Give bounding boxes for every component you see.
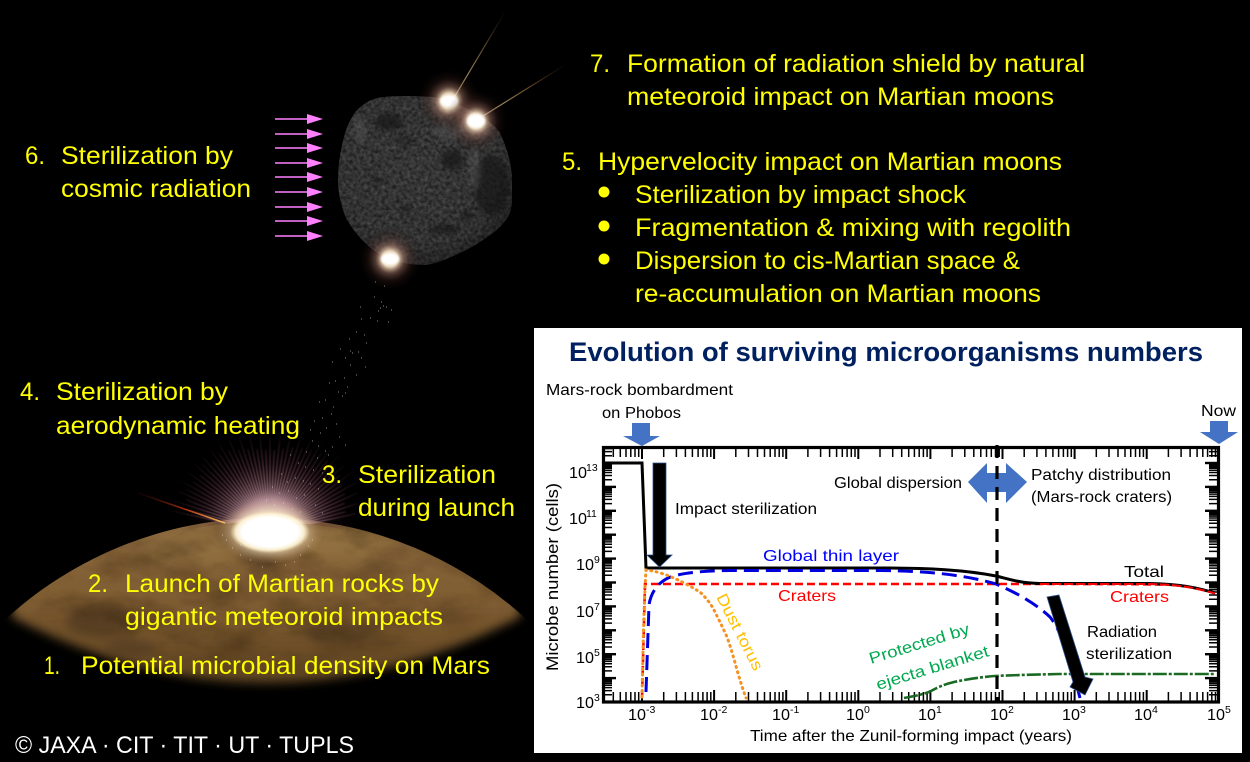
x axis tick labels: -2 — [718, 704, 727, 716]
text: step 2 — [88, 570, 443, 631]
copyright: © JAXA · CIT · TIT · UT · TUPLS — [15, 732, 354, 759]
y axis tick labels: 3 — [594, 692, 600, 704]
x axis tick labels: 10 — [1062, 707, 1080, 724]
label: dust torus: Dust torus — [712, 591, 766, 674]
text: step 7 — [590, 50, 1085, 111]
annotation: Mars-rock bombardment: on Phobos — [602, 405, 681, 422]
label: protected by ejecta blanket: Protected by — [867, 621, 972, 668]
text: step 2: 2. — [88, 570, 108, 598]
text: step 6: 6. — [25, 142, 45, 170]
y axis title: Microbe number (cells) — [543, 483, 562, 671]
y axis tick labels: 13 — [586, 462, 598, 474]
arrow: now — [1200, 421, 1238, 444]
x axis tick labels: 4 — [1152, 704, 1158, 716]
x axis tick labels: 2 — [1008, 704, 1014, 716]
label: global dispersion: Global dispersion — [834, 475, 962, 492]
y axis tick labels: 10 — [576, 604, 594, 621]
x axis tick labels: 10 — [1134, 707, 1152, 724]
x axis tick labels: 10 — [700, 707, 718, 724]
text: step 2: gigantic meteoroid impacts — [125, 603, 443, 631]
x axis tick labels: 10 — [918, 707, 936, 724]
label: radiation sterilization: Radiation — [1087, 624, 1157, 641]
text: step 4: aerodynamic heating — [56, 412, 300, 440]
chart frame — [604, 448, 1218, 702]
text: step 3 — [322, 461, 515, 522]
illustration: launch burst — [138, 436, 358, 562]
text: step 5: Fragmentation & mixing with regolith — [635, 214, 1071, 242]
text: step 5: 5. — [562, 148, 582, 176]
curve: craters overlay — [1040, 584, 1215, 594]
text: step 3: Sterilization — [358, 461, 496, 489]
label: radiation sterilization — [1086, 624, 1172, 663]
x axis tick labels: 10 — [1207, 707, 1225, 724]
y axis tick labels: 10 — [576, 695, 594, 712]
text: step 7: Formation of radiation shield by natural — [627, 50, 1085, 78]
text: step 6: Sterilization by — [61, 142, 234, 170]
chart title: Evolution of surviving microorganisms numbers — [569, 337, 1203, 367]
cosmic radiation arrows — [275, 114, 323, 241]
annotation: Now: Now — [1201, 403, 1236, 420]
text: step 4 — [20, 378, 300, 440]
annotation: Mars-rock bombardment — [546, 382, 734, 422]
label: patchy distribution: (Mars-rock craters) — [1031, 489, 1172, 506]
label: impact sterilization: Impact sterilization — [675, 501, 817, 518]
y axis tick labels: 10 — [576, 650, 594, 667]
curve: dust torus — [642, 570, 746, 698]
text: step 5: Hypervelocity impact on Martian moons — [598, 148, 1062, 176]
y axis tick labels: 10 — [569, 465, 587, 482]
text: step 5: Sterilization by impact shock — [635, 181, 967, 209]
y axis tick labels: 10 — [569, 511, 587, 528]
axis ticks — [592, 440, 1219, 702]
x axis tick labels: 0 — [864, 704, 870, 716]
label: total: Total — [1124, 564, 1164, 581]
label: protected by ejecta blanket: ejecta blanket — [874, 643, 992, 694]
x axis tick labels — [628, 704, 1231, 724]
text: step 2: Launch of Martian rocks by — [125, 570, 440, 598]
text: step 6: cosmic radiation — [61, 175, 251, 203]
text: step 3: during launch — [358, 494, 515, 522]
y axis tick labels — [569, 462, 600, 712]
divider: dashed vertical — [995, 445, 999, 702]
illustration: Mars surface — [7, 519, 525, 690]
text: step 4: Sterilization by — [56, 378, 229, 406]
text: step 5 — [562, 148, 1071, 308]
arrow: dispersion double arrow — [968, 463, 1027, 503]
x axis tick labels: 10 — [628, 707, 646, 724]
illustration: ejecta particles — [222, 282, 392, 567]
text: step 4: 4. — [20, 378, 40, 406]
x axis tick labels: 5 — [1225, 704, 1231, 716]
arrow: impact sterilization — [647, 463, 672, 567]
x axis tick labels: 10 — [990, 707, 1008, 724]
y axis tick labels: 11 — [586, 508, 597, 520]
text: step 5: re-accumulation on Martian moons — [635, 280, 1041, 308]
curve: craters — [642, 584, 1215, 698]
x axis title: Time after the Zunil-forming impact (years) — [750, 728, 1072, 745]
text: step 3: 3. — [322, 461, 342, 489]
text: step 7: 7. — [590, 50, 610, 78]
arrow: bombardment — [623, 423, 660, 446]
panel: chart — [534, 328, 1242, 753]
x axis tick labels: -3 — [646, 704, 655, 716]
text: step 7: meteoroid impact on Martian moons — [627, 83, 1054, 111]
label: craters right: Craters — [1110, 589, 1169, 606]
y axis tick labels: 5 — [594, 647, 600, 659]
label: patchy distribution: Patchy distribution — [1031, 467, 1171, 484]
curve: protected by ejecta blanket — [904, 674, 1215, 698]
y axis tick labels: 10 — [576, 557, 594, 574]
x axis tick labels: 10 — [772, 707, 790, 724]
x axis tick labels: 1 — [936, 704, 942, 716]
x axis tick labels: -1 — [790, 704, 799, 716]
text: step 1: Potential microbial density on Mars — [81, 652, 490, 680]
illustration: impact flashes — [358, 12, 565, 291]
label: craters left: Craters — [778, 588, 836, 605]
curve: total — [605, 463, 1215, 593]
annotation: Mars-rock bombardment: Mars-rock bombardment — [546, 382, 734, 399]
illustration: Martian moon — [338, 96, 512, 265]
curve: global thin layer — [646, 570, 1080, 698]
y axis tick labels: 7 — [594, 601, 600, 613]
arrow: radiation sterilization — [1047, 595, 1093, 695]
x axis tick labels: 10 — [846, 707, 864, 724]
x axis tick labels: 3 — [1080, 704, 1086, 716]
label: global thin layer: Global thin layer — [763, 548, 900, 565]
label: patchy distribution — [1031, 467, 1172, 506]
label: protected by ejecta blanket — [867, 621, 992, 694]
y axis tick labels: 9 — [594, 554, 600, 566]
text: step 6 — [25, 142, 251, 203]
text: step 5: Dispersion to cis-Martian space & — [635, 247, 1020, 275]
label: radiation sterilization: sterilization — [1086, 646, 1172, 663]
text: step 1: 1. — [44, 652, 60, 680]
